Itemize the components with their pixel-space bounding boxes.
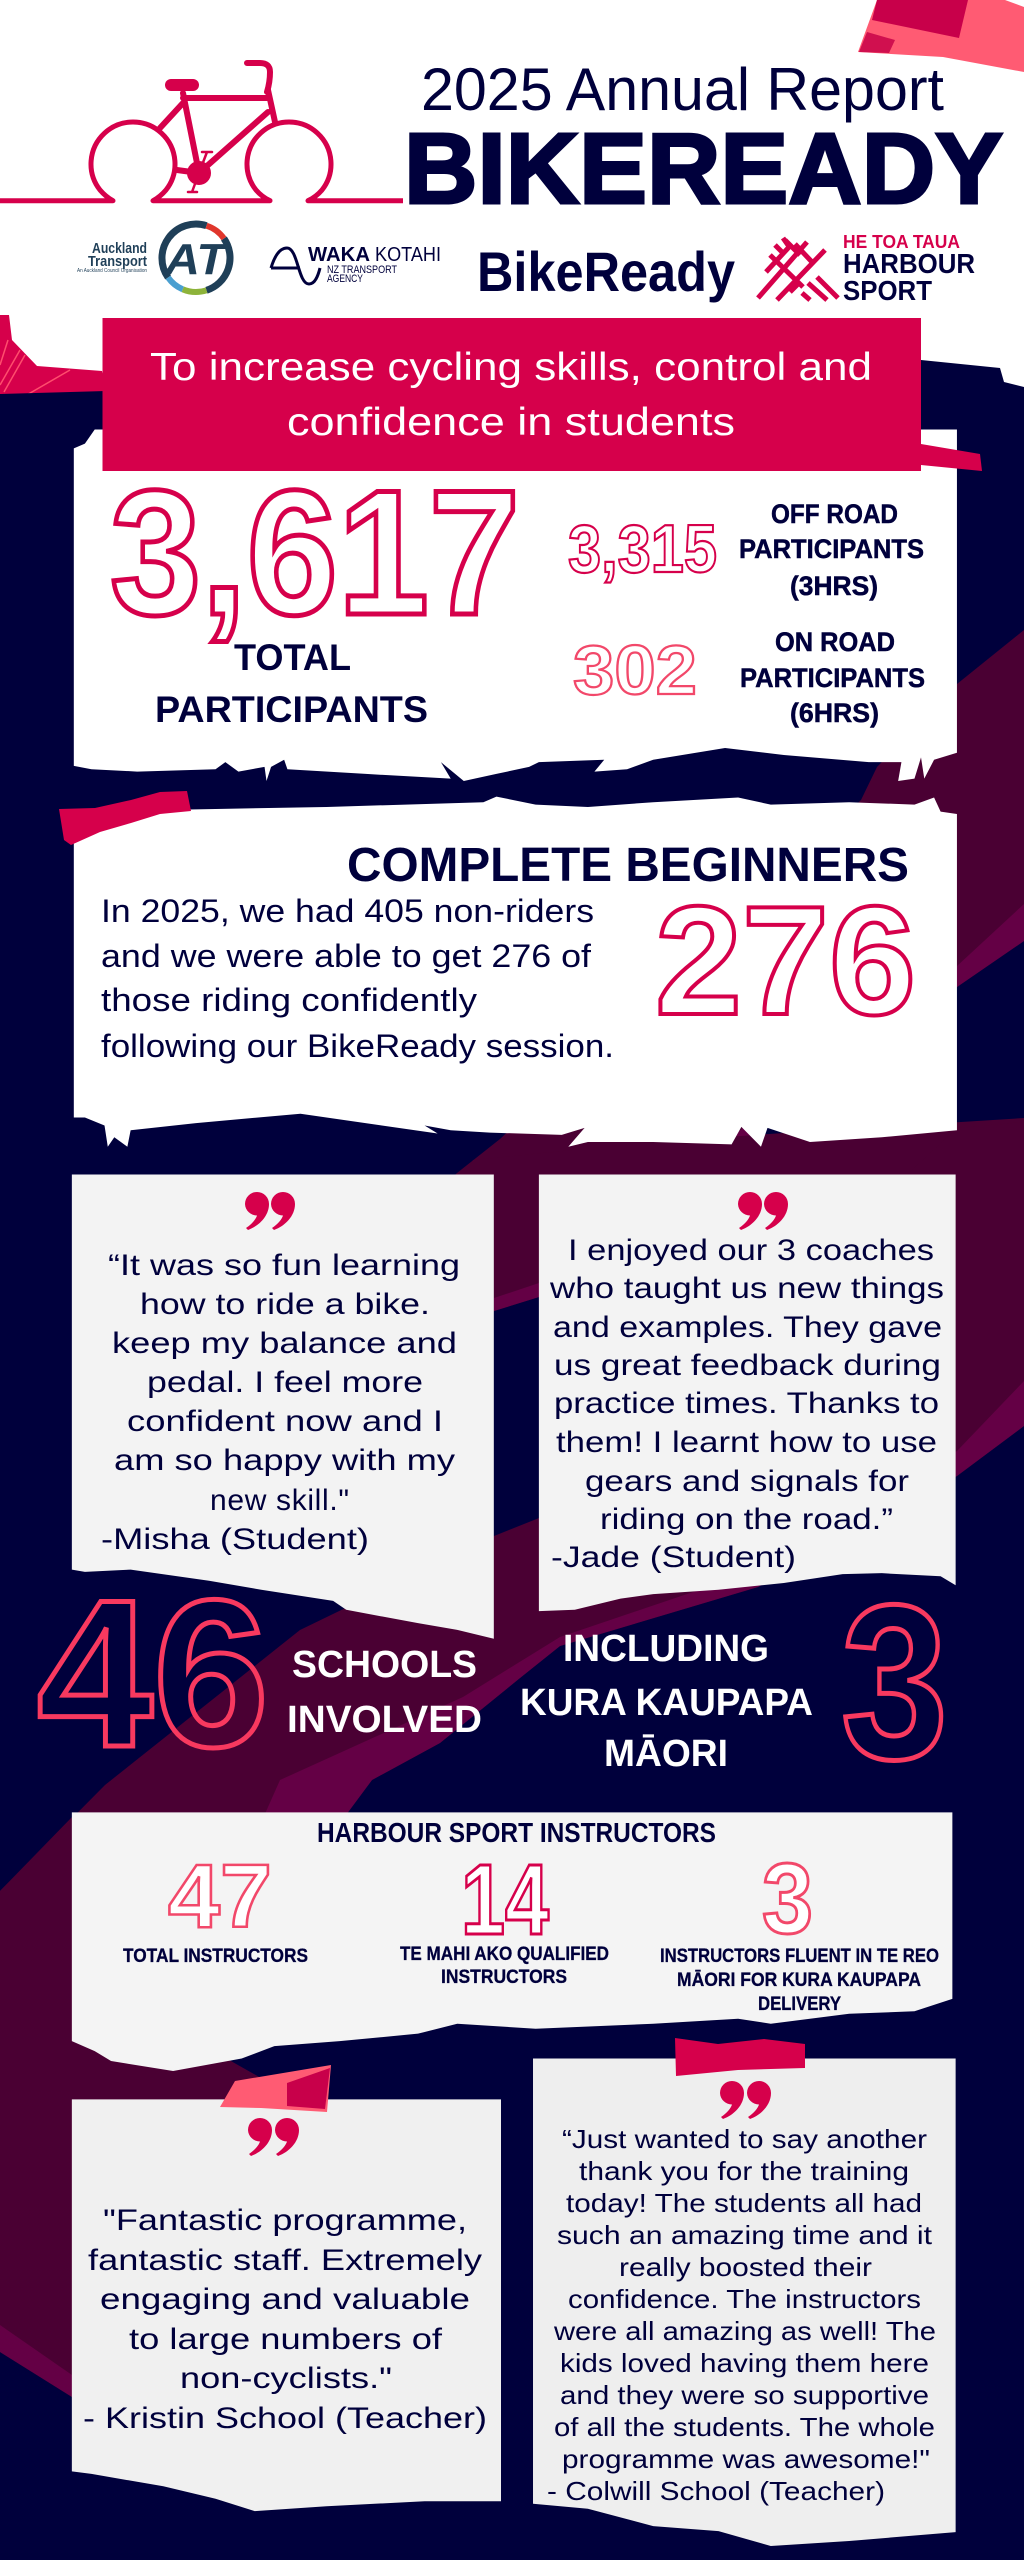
logo: Auckland Transport: Transport: [88, 253, 147, 270]
text: Misha quote: “It was so fun learning: [108, 1249, 460, 1282]
text: Colwill School quote: such an amazing time and it: [557, 2220, 933, 2250]
label: off road participants: [739, 499, 924, 601]
icon: quote mark: [248, 2118, 299, 2156]
text: Kristin School quote: [83, 2204, 487, 2435]
label: te mahi ako qualified instructors: [400, 1944, 609, 1988]
label: off road participants: PARTICIPANTS: [739, 534, 924, 564]
label: on road participants: PARTICIPANTS: [740, 663, 925, 693]
heading: Harbour Sport instructors: HARBOUR SPORT INSTRUCTORS: [317, 1817, 716, 1848]
label: including kura kaupapa Maori: MĀORI: [604, 1733, 728, 1775]
label: on road participants: ON ROAD: [775, 627, 895, 657]
icon: quote mark: [720, 2081, 771, 2119]
text: Misha quote: how to ride a bike.: [140, 1288, 430, 1321]
text: Kristin School quote: engaging and valuable: [100, 2283, 470, 2316]
text: Colwill School quote: today! The students all had: [566, 2188, 922, 2218]
panel: total participants: [74, 429, 957, 781]
banner: aim statement: To increase cycling skills, control and: [150, 346, 872, 389]
label: te mahi ako qualified instructors: INSTRUCTORS: [441, 1967, 567, 1988]
text: beginners description: In 2025, we had 405 non-riders: [101, 893, 594, 929]
text: Kristin School quote: to large numbers of: [129, 2323, 443, 2356]
text: Misha quote: pedal. I feel more: [147, 1366, 423, 1399]
label: te mahi ako qualified instructors: TE MAHI AKO QUALIFIED: [400, 1944, 609, 1965]
label: off road participants: (3HRS): [790, 571, 878, 601]
text: Kristin School quote: fantastic staff. Extremely: [88, 2244, 482, 2277]
label: on road participants: [740, 627, 925, 728]
text: beginners description: [101, 893, 614, 1064]
logo: BikeReady wordmark: BikeReady: [477, 240, 735, 303]
card: Misha testimonial: [72, 1175, 494, 1639]
label: including kura kaupapa Maori: INCLUDING: [563, 1628, 769, 1670]
label: total instructors: TOTAL INSTRUCTORS: [123, 1946, 308, 1967]
number: 276: 276: [655, 874, 916, 1047]
panel: complete beginners: [74, 797, 957, 1147]
heading: 2025 Annual Report: 2025 Annual Report: [421, 56, 944, 123]
text: Misha quote: confident now and I: [127, 1405, 443, 1438]
number: 3,315: 3,315: [568, 511, 717, 587]
label: total participants: TOTAL: [234, 637, 351, 678]
text: Jade quote: -Jade (Student): [551, 1541, 796, 1574]
text: Jade quote: them! I learnt how to use: [556, 1426, 937, 1459]
decoration: top right coral brush: [858, 0, 1024, 72]
banner: aim statement: [102, 318, 921, 471]
number: 46: 46: [37, 1556, 269, 1791]
text: Misha quote: [101, 1249, 460, 1556]
text: Misha quote: keep my balance and: [112, 1327, 457, 1360]
label: total participants: [155, 637, 428, 730]
text: Jade quote: [549, 1234, 944, 1574]
tape: right of banner: [921, 444, 982, 471]
logo: Harbour Sport: HE TOA TAUA: [843, 232, 960, 252]
text: Colwill School quote: were all amazing as well! The: [553, 2316, 936, 2346]
label: instructors fluent in te reo Maori: [660, 1946, 939, 2015]
decoration: left crimson brush: [0, 315, 110, 410]
logo: Waka Kotahi NZ Transport Agency: KOTAHI: [375, 244, 441, 266]
text: Jade quote: riding on the road.”: [600, 1503, 893, 1536]
text: Colwill School quote: of all the students. The whole: [554, 2412, 935, 2442]
text: Colwill School quote: and they were so supportive: [560, 2380, 929, 2410]
background: maroon swooshes: [0, 630, 1024, 2500]
logo: Waka Kotahi NZ Transport Agency: [271, 244, 441, 285]
text: beginners description: following our BikeReady session.: [101, 1028, 614, 1064]
logo: Waka Kotahi NZ Transport Agency: WAKA: [308, 244, 370, 266]
text: Misha quote: am so happy with my: [114, 1444, 455, 1477]
tape: crimson on Colwill card: [675, 2038, 805, 2076]
heading: complete beginners: COMPLETE BEGINNERS: [347, 839, 909, 892]
text: Jade quote: I enjoyed our 3 coaches: [568, 1234, 934, 1267]
text: Jade quote: and examples. They gave: [553, 1311, 942, 1344]
stat: 46 schools: [37, 1556, 482, 1791]
panel: Harbour Sport instructors: [72, 1812, 952, 2071]
number: 3: 3: [762, 1843, 813, 1955]
card: Colwill School testimonial: [533, 2059, 956, 2546]
label: instructors fluent in te reo Maori: MĀORI FOR KURA KAUPAPA: [677, 1970, 921, 1991]
label: schools involved: SCHOOLS: [292, 1644, 477, 1686]
text: Jade quote: who taught us new things: [549, 1272, 944, 1305]
logo: Auckland Transport: AT: [164, 235, 229, 284]
icon: quote mark: [738, 1192, 788, 1230]
text: beginners description: and we were able to get 276 of: [101, 938, 591, 974]
logo: Harbour Sport: [758, 232, 975, 306]
label: total participants: PARTICIPANTS: [155, 689, 428, 730]
text: Colwill School quote: - Colwill School (Teacher): [547, 2476, 885, 2506]
label: schools involved: [287, 1644, 482, 1741]
tape: coral on Kristin card: [220, 2065, 331, 2112]
label: off road participants: OFF ROAD: [771, 499, 898, 529]
label: on road participants: (6HRS): [790, 698, 879, 728]
banner: aim statement: confidence in students: [287, 401, 735, 444]
text: Kristin School quote: non-cyclists.": [180, 2362, 392, 2395]
logo: bicycle line art: [0, 63, 403, 201]
text: Misha quote: -Misha (Student): [101, 1523, 369, 1556]
text: Colwill School quote: really boosted their: [619, 2252, 872, 2282]
text: Kristin School quote: "Fantastic programme,: [103, 2204, 467, 2237]
logo: Auckland Transport: An Auckland Council Organisation: [77, 268, 147, 274]
text: beginners description: those riding confidently: [101, 982, 477, 1018]
label: instructors fluent in te reo Maori: INSTRUCTORS FLUENT IN TE REO: [660, 1946, 939, 1967]
number: 3: 3: [841, 1559, 948, 1805]
text: Colwill School quote: [547, 2124, 936, 2506]
logo: Waka Kotahi NZ Transport Agency: NZ TRANSPORT: [327, 264, 397, 276]
tape: left of beginners panel: [59, 791, 191, 845]
number: 302: 302: [573, 631, 697, 709]
number: 47: 47: [168, 1847, 272, 1947]
label: including kura kaupapa Maori: KURA KAUPAPA: [520, 1682, 813, 1724]
logo: Auckland Transport: Auckland: [92, 240, 147, 257]
label: including kura kaupapa Maori: [520, 1628, 813, 1775]
label: schools involved: INVOLVED: [287, 1699, 482, 1741]
logo: Auckland Transport: [77, 224, 230, 292]
text: Colwill School quote: programme was awesome!": [562, 2444, 930, 2474]
logo: Waka Kotahi NZ Transport Agency: AGENCY: [327, 273, 364, 285]
card: Jade testimonial: [539, 1175, 956, 1611]
stat: 3 kura kaupapa: [520, 1559, 948, 1805]
number: 14: 14: [461, 1844, 549, 1956]
text: Jade quote: practice times. Thanks to: [554, 1387, 939, 1420]
heading: BIKEREADY: BIKEREADY: [404, 113, 1003, 225]
text: Colwill School quote: “Just wanted to say another: [562, 2124, 927, 2154]
text: Colwill School quote: thank you for the training: [579, 2156, 909, 2186]
text: Jade quote: us great feedback during: [554, 1349, 941, 1382]
logo: Harbour Sport: HARBOUR: [843, 248, 975, 279]
logo: Harbour Sport: SPORT: [843, 275, 932, 306]
card: Kristin School testimonial: [72, 2099, 501, 2511]
text: Kristin School quote: - Kristin School (Teacher): [83, 2402, 487, 2435]
text: Misha quote: new skill.": [210, 1484, 349, 1517]
text: Jade quote: gears and signals for: [585, 1465, 909, 1498]
label: instructors fluent in te reo Maori: DELIVERY: [758, 1994, 841, 2015]
number: 3,617: 3,617: [110, 453, 520, 652]
text: Colwill School quote: kids loved having them here: [560, 2348, 929, 2378]
icon: quote mark: [245, 1192, 295, 1230]
text: Colwill School quote: confidence. The instructors: [568, 2284, 921, 2314]
